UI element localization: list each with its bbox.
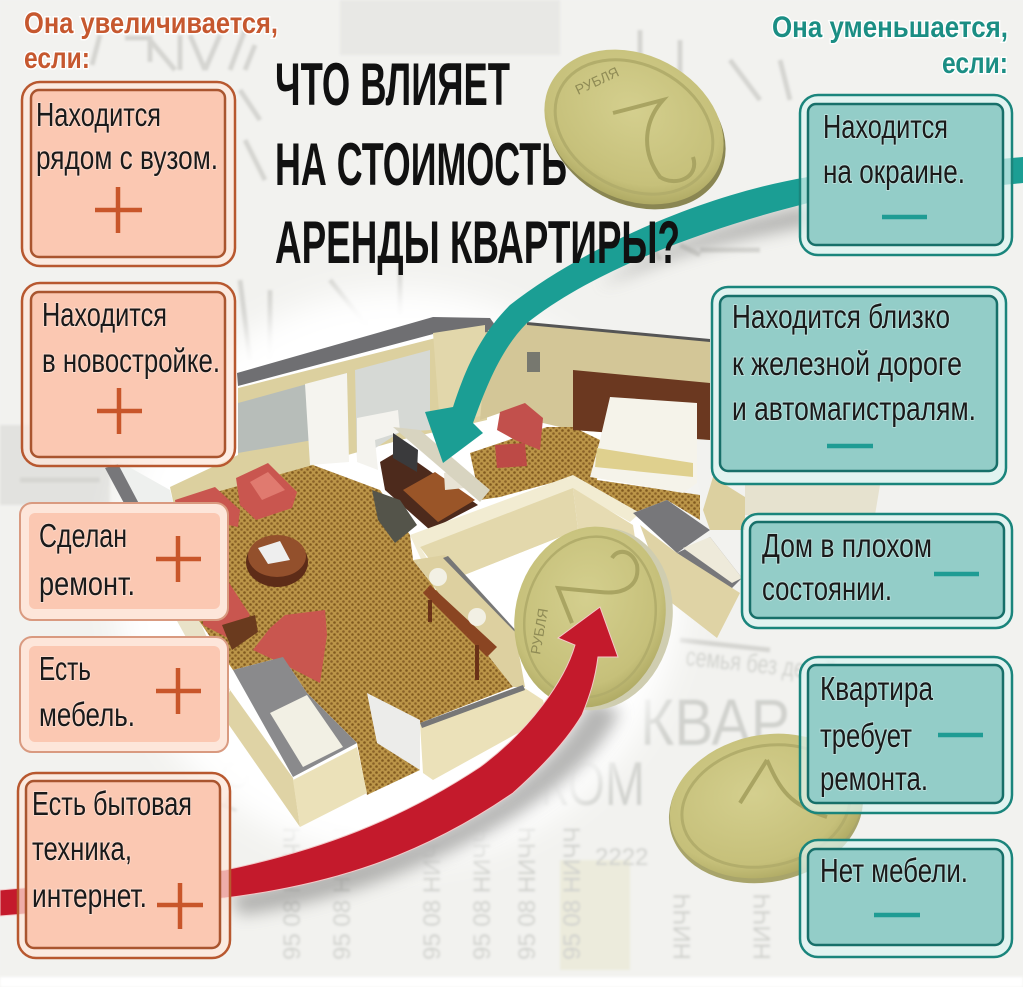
panel: near university: рядом с вузом. xyxy=(36,139,218,176)
armchairs and furniture xyxy=(175,403,543,683)
background: faint handwritten notes: 95 08 НИЧЧ xyxy=(559,827,586,960)
panel: furniture: Есть xyxy=(39,650,91,687)
panel: renovated: Сделан xyxy=(39,517,127,554)
title: АРЕНДЫ КВАРТИРЫ? xyxy=(275,209,680,276)
back wall with windows xyxy=(170,325,487,510)
panel: near railway and motorways: к железной дороге xyxy=(732,345,962,382)
white glow behind apartment xyxy=(115,290,685,860)
heading: increases xyxy=(24,7,278,75)
bed xyxy=(573,370,710,493)
background: faint handwritten notes: КОМ xyxy=(540,750,645,819)
coin: bottom xyxy=(655,716,877,901)
coin: top xyxy=(517,19,753,240)
background: faint handwritten notes: 95 08 НИЧЧ xyxy=(329,827,356,960)
title xyxy=(275,51,680,276)
panel: bad condition: состоянии. xyxy=(762,570,892,607)
background: faint handwritten notes: семья без детей xyxy=(684,641,837,687)
background: faint handwritten notes: FOTO xyxy=(204,705,279,818)
panel: furniture: мебель. xyxy=(39,696,135,733)
panel: bad condition xyxy=(742,514,1012,628)
panel: no furniture: Нет мебели. xyxy=(820,852,968,889)
background: faint handwritten notes: 95 08 НИЧЧ xyxy=(469,827,496,960)
window right xyxy=(355,350,430,460)
title: ЧТО ВЛИЯЕТ xyxy=(275,51,510,118)
panel: renovated: ремонт. xyxy=(39,565,135,602)
illustration: apartment floor plan xyxy=(105,317,880,827)
coin: middle xyxy=(498,512,689,725)
window left xyxy=(238,373,348,457)
red arrow xyxy=(0,607,618,916)
desk and TV xyxy=(372,427,490,543)
heading: increases: Она увеличивается, xyxy=(24,7,278,40)
panel: renovated xyxy=(20,503,228,620)
right block xyxy=(633,500,710,553)
panel: appliances and internet: техника, xyxy=(32,830,132,867)
background: faint handwritten notes: 2222 xyxy=(595,844,648,871)
panel: no furniture xyxy=(800,840,1012,957)
panel: near university xyxy=(22,82,235,266)
panel: furniture xyxy=(20,637,228,752)
background: faint handwritten notes: 95 08 НИЧЧ xyxy=(419,827,446,960)
heading: decreases xyxy=(772,11,1008,80)
panel: near university: Находится xyxy=(36,96,161,133)
background: faint handwritten notes: 95 08 НИЧЧ xyxy=(514,827,541,960)
background: faint handwritten notes: КВАР xyxy=(640,685,790,759)
panel: new building: в новостройке. xyxy=(42,342,220,379)
panel: appliances and internet xyxy=(18,773,230,958)
right room back wall xyxy=(480,323,710,440)
panel: outskirts: на окраине. xyxy=(823,153,965,190)
door and front right wall xyxy=(367,693,420,770)
title: НА СТОИМОСТЬ xyxy=(275,131,567,198)
background: faint handwritten notes: 95 08 НИЧЧ xyxy=(279,827,306,960)
panel: new building xyxy=(22,283,235,466)
panel: bad condition: Дом в плохом xyxy=(762,527,932,564)
left outer window and wall xyxy=(105,462,175,515)
panel: near railway and motorways xyxy=(712,287,1006,484)
panel: near railway and motorways: Находится близко xyxy=(732,298,950,335)
coin: middle: РУБЛЯ xyxy=(527,607,551,656)
panel: needs renovation: требует xyxy=(820,717,912,754)
panel: needs renovation: ремонта. xyxy=(820,760,928,797)
inner room walls xyxy=(410,475,640,590)
front left block xyxy=(233,657,357,777)
background: faint handwritten notes: НИЧЧ xyxy=(669,893,696,960)
arrow shadows xyxy=(230,205,810,915)
panel: outskirts xyxy=(800,95,1012,255)
background: faint handwritten notes: НИЧЧ xyxy=(749,893,776,960)
heading: increases: если: xyxy=(24,42,90,75)
panel: appliances and internet: Есть бытовая xyxy=(32,785,192,822)
panel: needs renovation: Квартира xyxy=(820,670,934,707)
right room floor xyxy=(470,427,700,520)
panel: appliances and internet: интернет. xyxy=(32,877,147,914)
panel: new building: Находится xyxy=(42,296,167,333)
heading: decreases: если: xyxy=(942,47,1008,80)
teal arrow xyxy=(425,157,1023,463)
panel: needs renovation xyxy=(800,657,1012,813)
panel: outskirts: Находится xyxy=(823,108,948,145)
coin: top: РУБЛЯ xyxy=(573,64,621,98)
carpet floor xyxy=(170,465,513,795)
